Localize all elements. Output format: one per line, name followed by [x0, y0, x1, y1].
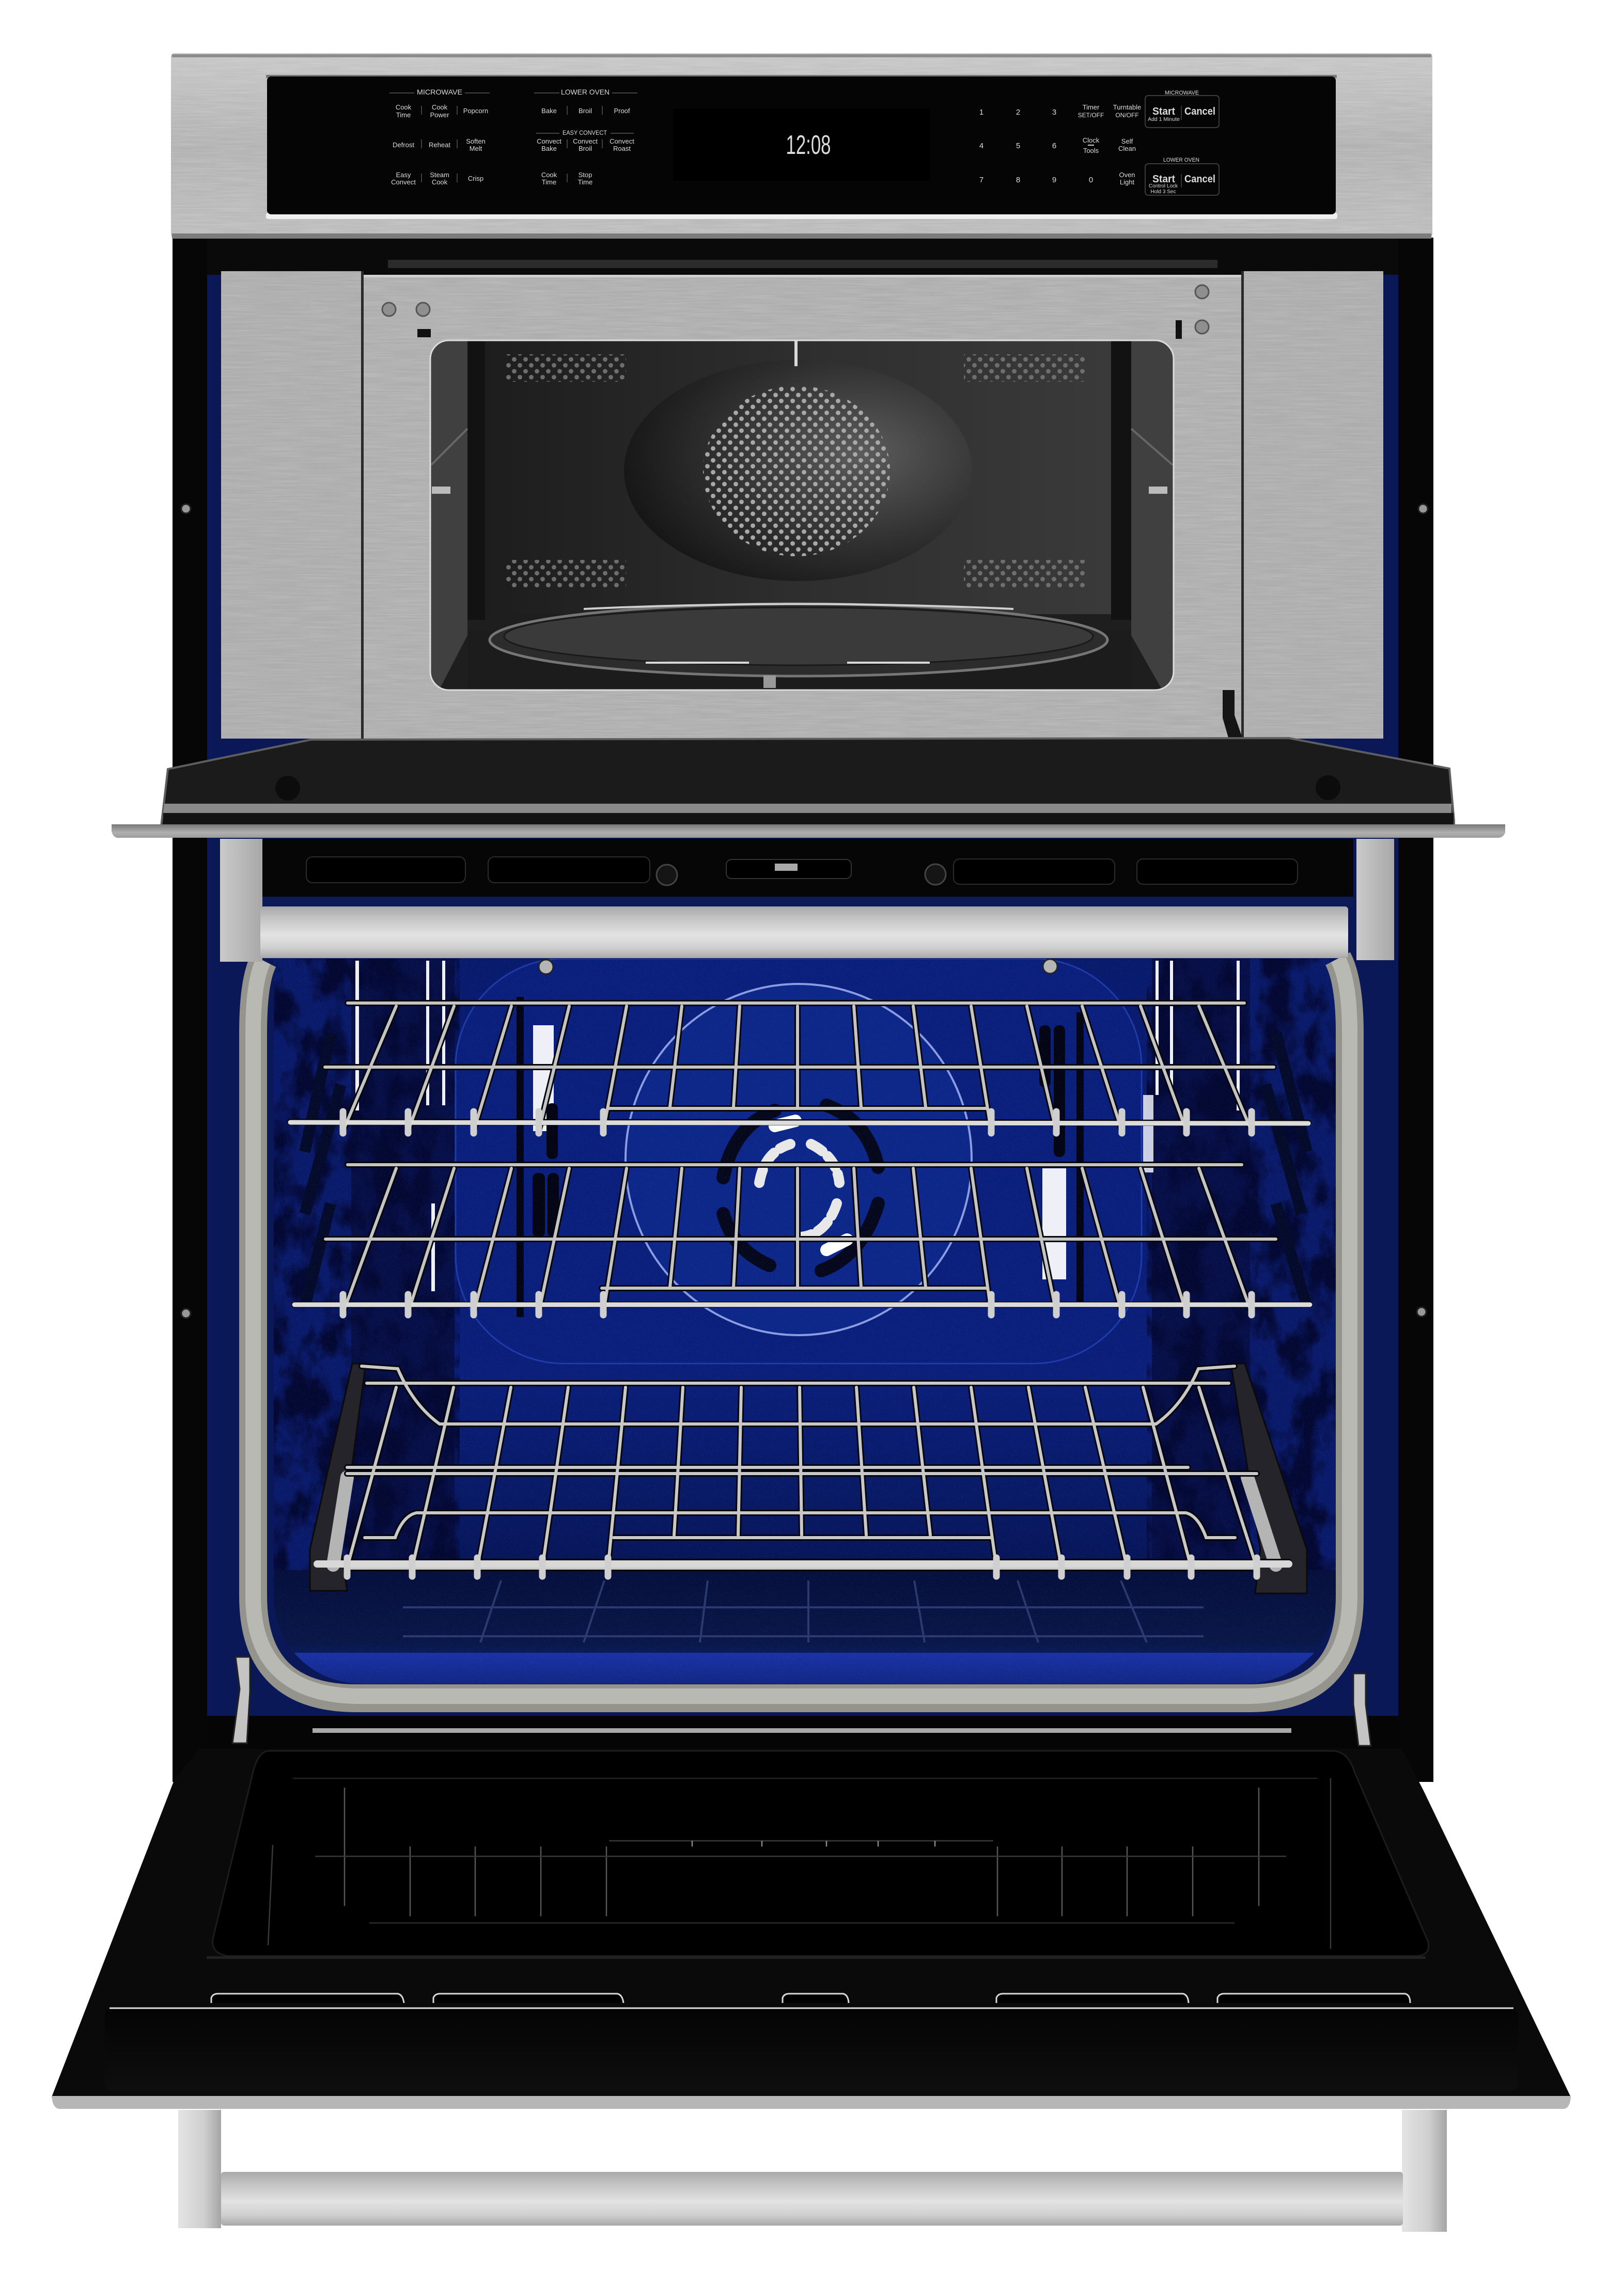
door front face	[105, 2008, 1518, 2091]
control panel	[171, 53, 1432, 239]
fan surround	[626, 984, 972, 1335]
inner glass with rack reflection	[268, 1778, 1331, 1949]
number keypad: 5	[1016, 142, 1020, 150]
microwave section	[221, 271, 1383, 740]
cavity base colour	[258, 956, 1348, 1689]
utility keys: Light	[1120, 178, 1134, 186]
utility keys: SET/OFF	[1078, 112, 1104, 119]
clock display: 12:08	[786, 130, 831, 160]
lower oven start and cancel keys	[1145, 157, 1219, 195]
door vent slots	[211, 1994, 1410, 2003]
front enamel lip	[274, 1653, 1336, 1684]
oven door handle	[178, 2110, 1447, 2232]
microwave function keys: MICROWAVE	[417, 88, 462, 96]
door lower shadow	[163, 813, 1454, 824]
door well	[213, 1751, 1429, 1956]
right standoff	[1402, 2110, 1447, 2232]
oven floor	[274, 1570, 1336, 1655]
lower oven function keys: Broil	[579, 145, 592, 152]
lower oven function keys: Roast	[613, 145, 631, 152]
left bracket	[220, 839, 262, 962]
door front ridge highlight	[110, 2007, 1513, 2009]
oven door roller trim	[220, 839, 1394, 962]
band screws	[657, 865, 677, 885]
number keypad: 2	[1016, 108, 1020, 117]
lower oven function keys: Convect	[573, 137, 598, 145]
vent hole groups	[505, 354, 1086, 587]
door body	[52, 1749, 1571, 2102]
door gasket	[253, 959, 1350, 1698]
lower oven function keys: Time	[542, 178, 556, 186]
microwave vent strip	[388, 260, 1217, 268]
cavity side walls	[430, 340, 1174, 690]
lower oven start and cancel keys: LOWER OVEN	[1163, 157, 1199, 163]
handle bar	[221, 2172, 1403, 2226]
microwave start and cancel keys: Add 1 Minute	[1148, 116, 1180, 122]
utility keys: Timer	[1083, 103, 1100, 111]
number keypad: 0	[1089, 176, 1093, 184]
glass turntable	[490, 604, 1107, 688]
stainless side panels	[221, 271, 1383, 739]
side wall studs	[432, 487, 450, 494]
microwave function keys: Power	[430, 111, 449, 119]
microwave start and cancel keys: Start	[1152, 106, 1175, 117]
utility keys: Self	[1121, 137, 1133, 145]
microwave start and cancel keys: Cancel	[1184, 106, 1215, 117]
upper bracket screws	[539, 960, 553, 974]
well rim	[207, 1957, 1426, 1959]
fan grille perforations	[703, 386, 890, 556]
lower oven function keys: Broil	[579, 107, 592, 115]
number keypad: 9	[1052, 176, 1056, 184]
utility keys: ON/OFF	[1115, 112, 1139, 119]
cavity floor	[467, 630, 1131, 690]
lower oven function keys: Convect	[537, 137, 561, 145]
lower oven function keys: Cook	[541, 171, 557, 179]
open microwave door	[112, 738, 1505, 838]
oven cabinet body	[173, 238, 1433, 1782]
microwave function keys: Defrost	[393, 141, 414, 149]
enamel speckle	[274, 959, 1336, 1684]
convection dome	[624, 379, 963, 581]
lower oven function keys: Bake	[541, 107, 557, 115]
microwave function keys: Crisp	[468, 175, 483, 182]
utility keys	[1078, 103, 1141, 186]
door left bolt	[275, 776, 300, 801]
utility keys: Clean	[1118, 145, 1136, 152]
embossed back panel	[456, 959, 1142, 1364]
number keypad: 1	[979, 108, 983, 117]
waveguide tick	[794, 340, 798, 366]
microwave function keys: Easy	[396, 171, 411, 179]
microwave function keys: Popcorn	[463, 107, 488, 115]
door chrome edge	[112, 824, 1505, 838]
microwave function keys: Cook	[396, 103, 412, 111]
microwave function keys: Melt	[470, 145, 482, 152]
upper rack	[290, 1003, 1308, 1133]
microwave function keys: Cook	[432, 178, 448, 186]
right side wall	[1152, 959, 1336, 1668]
door sill	[207, 1716, 1398, 1752]
microwave function keys: Reheat	[429, 141, 450, 149]
lower oven start and cancel keys: Start	[1152, 174, 1175, 185]
number keypad: 7	[979, 176, 983, 184]
door right bolt	[1316, 775, 1340, 800]
utility keys: Tools	[1083, 147, 1099, 154]
lower roll-out rack	[310, 1364, 1307, 1593]
dark wall corners	[351, 959, 1250, 1570]
utility keys: Turntable	[1113, 103, 1141, 111]
black glass touch panel	[266, 75, 1337, 219]
lower oven function keys: Convect	[610, 137, 634, 145]
stainless fascia	[171, 53, 1432, 239]
microwave function keys	[389, 88, 490, 186]
frame fasteners	[382, 285, 1242, 738]
rear vertical slots	[517, 997, 1084, 1317]
lower oven start and cancel keys: Hold 3 Sec	[1151, 189, 1176, 195]
stainless front frame	[364, 275, 1241, 740]
side wall mottling	[274, 959, 460, 1594]
door gray ridge	[163, 804, 1451, 813]
number keypad: 6	[1052, 142, 1056, 150]
lower oven start and cancel keys: Control Lock	[1149, 183, 1178, 189]
convection fan slots	[723, 1105, 878, 1271]
number keypad	[979, 108, 1093, 184]
door latch	[726, 859, 851, 879]
number keypad: 3	[1052, 108, 1056, 117]
utility keys: Oven	[1119, 171, 1135, 179]
right bracket	[1356, 839, 1394, 960]
lower oven function keys: EASY CONVECT	[563, 129, 607, 136]
microwave start and cancel keys	[1145, 90, 1219, 128]
middle rack	[294, 1165, 1310, 1315]
lower oven function keys: Time	[578, 178, 592, 186]
lower oven function keys: Stop	[579, 171, 592, 179]
microwave cavity	[430, 340, 1174, 690]
number keypad: 8	[1016, 176, 1020, 184]
chrome door edge	[52, 2096, 1571, 2109]
upper oven vent band	[262, 839, 1353, 908]
number keypad: 4	[979, 142, 983, 150]
rear gloss streaks	[355, 961, 1240, 1291]
oven cavity	[227, 950, 1379, 1725]
lower oven start and cancel keys: Cancel	[1184, 174, 1215, 185]
roller bar	[260, 906, 1348, 958]
lower oven function keys: Proof	[614, 107, 630, 115]
door inner panel	[161, 738, 1454, 826]
microwave start and cancel keys: MICROWAVE	[1165, 90, 1199, 96]
lower oven function keys: LOWER OVEN	[561, 88, 610, 96]
cavity bright rim	[430, 340, 1174, 690]
lower oven function keys: Bake	[541, 145, 557, 152]
open oven door	[52, 1657, 1571, 2109]
microwave function keys: Convect	[391, 178, 416, 186]
cavity back wall	[651, 341, 1111, 614]
floor rack reflection	[403, 1580, 1204, 1642]
sill highlight	[313, 1728, 1291, 1733]
vent slots	[306, 857, 1298, 884]
rack support wall ribs	[305, 1033, 1307, 1307]
microwave function keys: Soften	[466, 137, 486, 145]
microwave function keys: Steam	[430, 171, 449, 179]
oven racks	[290, 1003, 1310, 1593]
door hinges	[232, 1657, 1371, 1746]
microwave function keys: Time	[396, 111, 411, 119]
left side wall	[274, 959, 444, 1668]
lower oven function keys	[534, 88, 637, 186]
utility keys: Clock	[1083, 136, 1100, 144]
left standoff	[178, 2110, 221, 2228]
microwave function keys: Cook	[432, 103, 448, 111]
cavity back wall	[444, 959, 1152, 1558]
